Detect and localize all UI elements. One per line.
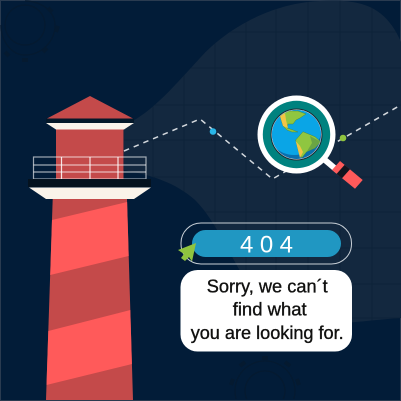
handle: [325, 160, 338, 171]
railing: [34, 157, 146, 179]
background gear bottom: [231, 358, 299, 399]
north america: [280, 111, 306, 132]
background blob with grid: [124, 0, 401, 322]
message text: [191, 276, 344, 343]
message text: find what: [233, 299, 307, 320]
blue dot: [210, 128, 216, 135]
404 text: 404: [240, 232, 293, 258]
south america: [296, 132, 321, 158]
bright stripe lower: [46, 310, 132, 385]
message card: [180, 270, 352, 352]
globe: [270, 108, 322, 160]
deck: [28, 179, 151, 187]
bright stripe upper: [50, 202, 129, 275]
cursor arrow: [178, 243, 196, 262]
tower: [46, 199, 133, 400]
lantern room: [56, 130, 124, 180]
404 pill: [181, 223, 352, 264]
background gear top left: [1, 1, 58, 60]
message text: Sorry, we can´t: [207, 276, 328, 297]
lighthouse: [28, 96, 151, 400]
magnifying glass: [258, 96, 363, 189]
message text: you are looking for.: [191, 322, 344, 343]
lens ring: [258, 96, 336, 174]
green dot: [340, 135, 346, 141]
roof: [46, 96, 134, 119]
dashed path: [124, 106, 399, 179]
